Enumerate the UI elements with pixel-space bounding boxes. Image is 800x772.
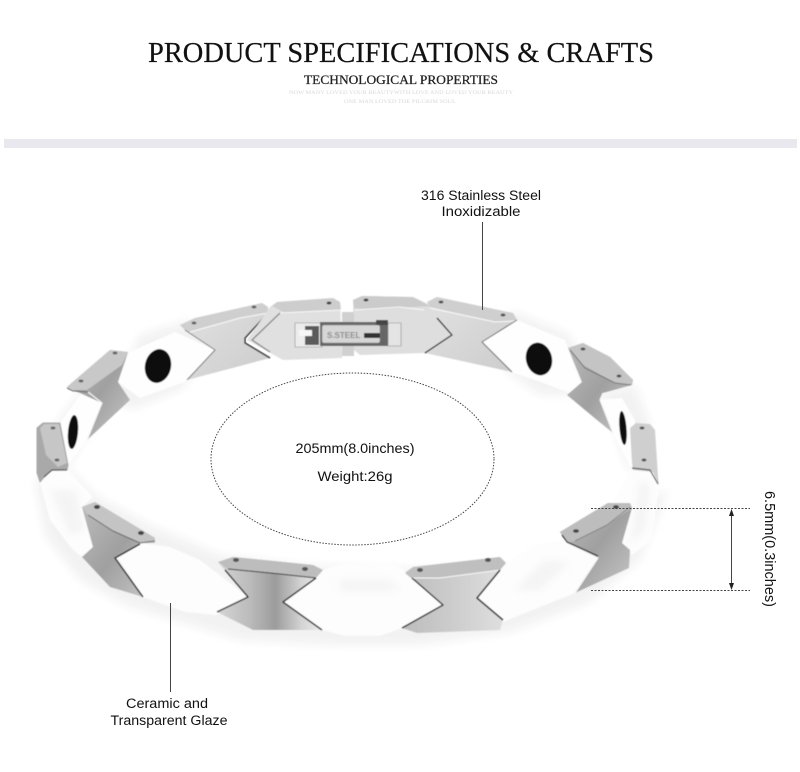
dotted ellipse bbox=[211, 373, 494, 545]
clasp centre with engraving bbox=[295, 312, 401, 356]
bracelet bbox=[35, 296, 668, 645]
callout: ceramic: Transparent Glaze bbox=[110, 713, 228, 728]
callout: ceramic bbox=[110, 603, 228, 728]
callout: ceramic: Ceramic and bbox=[126, 696, 208, 711]
width dimension: 6.5mm(0.3inches) bbox=[761, 491, 778, 607]
steel link: lower left diagonal bbox=[82, 502, 155, 597]
width dimension bbox=[591, 491, 778, 607]
weight spec: Weight:26g bbox=[318, 468, 392, 484]
steel link: left vertical bbox=[37, 423, 68, 482]
steel link: bottom left bbox=[217, 557, 323, 630]
ceramic highlights bbox=[50, 480, 650, 592]
faint tagline: ONE MAN LOVED THE PILGRIM SOUL bbox=[344, 99, 457, 105]
header divider band bbox=[4, 139, 797, 148]
length spec: 205mm(8.0inches) bbox=[296, 440, 414, 456]
magnet ceramic pieces bbox=[60, 320, 635, 470]
steel clasp right bbox=[353, 296, 452, 355]
faint tagline bbox=[289, 90, 513, 105]
icon: black magnets bbox=[67, 340, 628, 449]
ceramic soft shadow bbox=[35, 310, 668, 645]
callout: stainless steel: 316 Stainless Steel bbox=[421, 188, 541, 203]
clasp centre with engraving: S.STEEL bbox=[327, 331, 360, 340]
steel link: left diagonal bbox=[67, 350, 130, 440]
callout: stainless steel: Inoxidizable bbox=[442, 204, 520, 219]
steel link: lower right diagonal bbox=[560, 503, 632, 593]
ceramic pieces bbox=[40, 470, 659, 636]
steel link: upper right bbox=[425, 297, 517, 372]
title: PRODUCT SPECIFICATIONS & CRAFTS bbox=[148, 38, 654, 69]
faint tagline: NOW MANY LOVED YOUR BEAUTYWITH LOVE AND LOVED YOUR BEAUTY bbox=[289, 90, 513, 96]
steel clasp left bbox=[247, 298, 342, 360]
steel link: right diagonal bbox=[567, 343, 633, 433]
steel link: bottom right bbox=[402, 557, 506, 633]
callout: stainless steel bbox=[421, 188, 541, 310]
subtitle: TECHNOLOGICAL PROPERTIES bbox=[304, 72, 498, 87]
steel link: right vertical bbox=[630, 423, 659, 485]
steel link: upper left bbox=[180, 303, 270, 380]
